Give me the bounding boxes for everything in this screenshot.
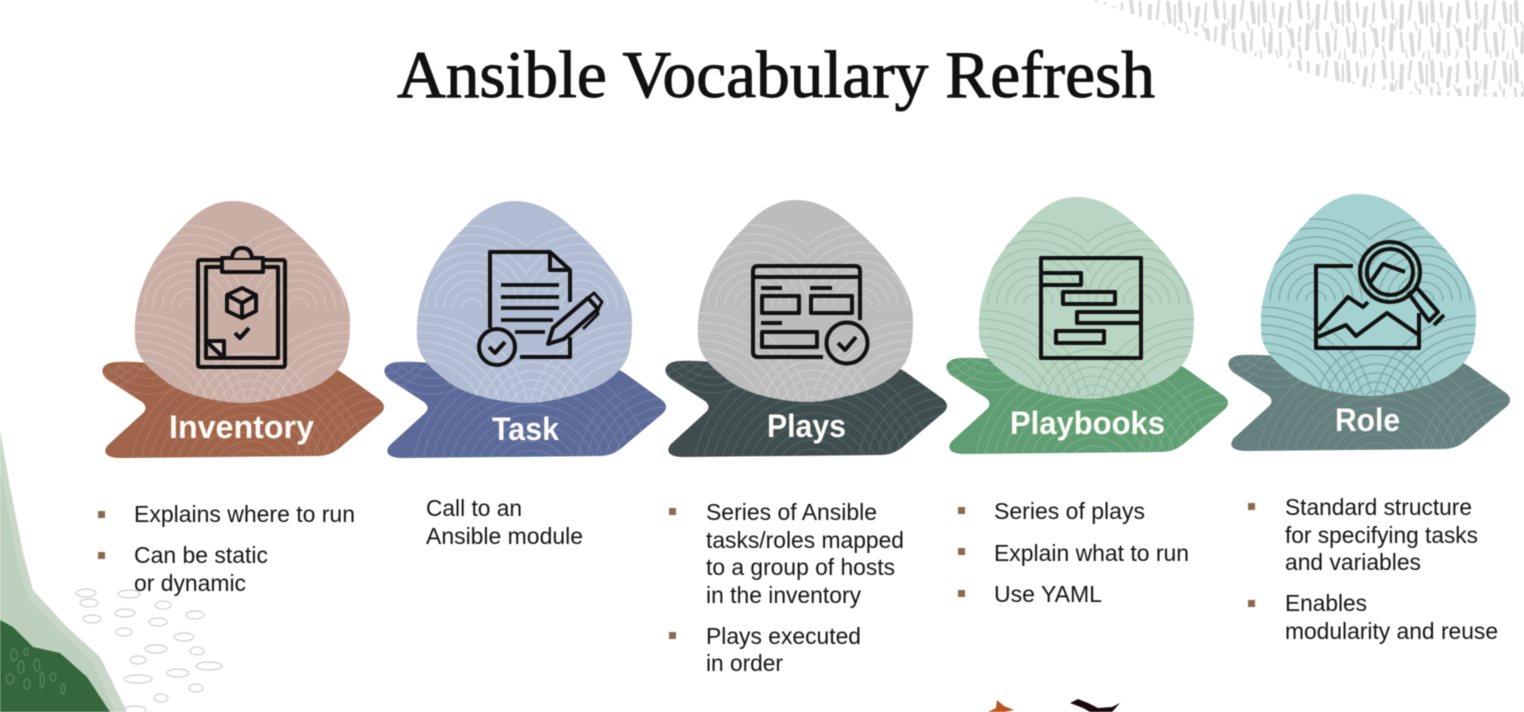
text block: Plays bullets: Series of Ansible xyxy=(706,499,877,525)
panel: Plays xyxy=(584,200,1038,599)
panel: Role xyxy=(1147,194,1524,593)
text block: Role bullets: Enables xyxy=(1285,590,1367,616)
text block: Playbooks bullets: Explain what to run xyxy=(994,540,1189,566)
label: Plays: Plays xyxy=(767,408,846,444)
text block: Inventory bullets: or dynamic xyxy=(134,570,246,596)
text block: Role bullets: and variables xyxy=(1285,549,1421,575)
text block: Playbooks bullets: Use YAML xyxy=(994,581,1102,607)
text block: Playbooks bullets: Series of plays xyxy=(994,498,1145,524)
label: Inventory: Inventory xyxy=(169,409,314,445)
text block: Task description: Ansible module xyxy=(426,523,583,549)
label: Playbooks: Playbooks xyxy=(1010,405,1165,441)
text block: Plays bullets: Plays executed xyxy=(706,623,861,649)
text block: Role bullets: for specifying tasks xyxy=(1285,522,1478,548)
text block: Task description xyxy=(426,495,583,549)
text block: Role bullets: modularity and reuse xyxy=(1285,618,1498,644)
label: Task: Task xyxy=(492,411,559,447)
decoration: outlined pebbles xyxy=(76,589,222,712)
icon: clipboard with box xyxy=(198,248,285,367)
decoration: bottom left hills xyxy=(0,430,127,712)
text block: Role bullets xyxy=(1248,494,1498,644)
background texture: top right xyxy=(1090,0,1524,98)
text block: Plays bullets: to a group of hosts xyxy=(706,554,895,580)
panel: Task xyxy=(303,201,757,600)
panel: Inventory xyxy=(21,201,475,600)
icon: gantt chart xyxy=(1041,258,1141,358)
icon: black bird xyxy=(1070,699,1120,712)
text block: Plays bullets xyxy=(669,499,904,676)
text block: Inventory bullets xyxy=(98,501,355,596)
icon: form window with check xyxy=(753,266,868,364)
text block: Plays bullets: in order xyxy=(706,650,783,676)
icon: orange bird xyxy=(988,700,1014,712)
text block: Plays bullets: in the inventory xyxy=(706,582,861,608)
label: Role: Role xyxy=(1335,402,1400,438)
icon: picture with magnifier xyxy=(1316,242,1444,348)
text block: Inventory bullets: Can be static xyxy=(134,542,268,568)
icon: document with pen and check xyxy=(479,252,602,365)
text block: Role bullets: Standard structure xyxy=(1285,494,1472,520)
text block: Task description: Call to an xyxy=(426,495,522,521)
text block: Inventory bullets: Explains where to run xyxy=(134,501,355,527)
panel: Playbooks xyxy=(865,197,1319,596)
title: Ansible Vocabulary Refresh xyxy=(397,38,1155,112)
text block: Playbooks bullets xyxy=(958,498,1189,607)
text block: Plays bullets: tasks/roles mapped xyxy=(706,527,904,553)
